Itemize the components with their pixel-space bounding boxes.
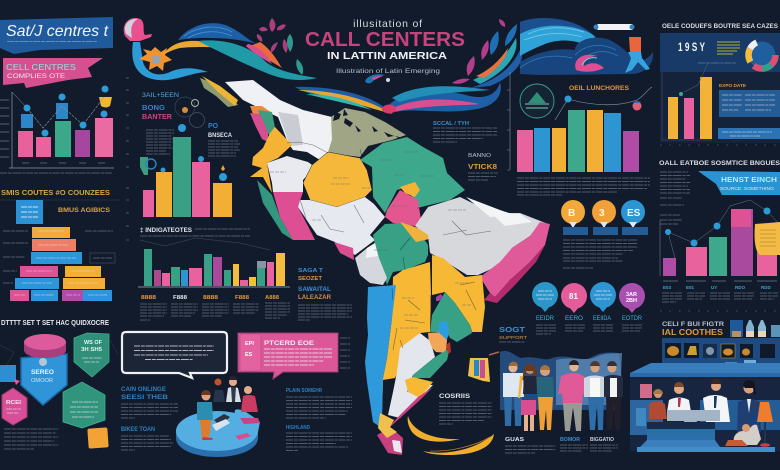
text block: online: CAIN ONLINGE [121, 387, 166, 393]
illustration: meeting table [176, 376, 260, 457]
chart captions: F888 [173, 295, 187, 301]
icon group: coloured shields: OMOOR [31, 378, 53, 384]
panel: right dashboard: 1 9 S Y [678, 40, 705, 54]
icons: four balloon circles: 81 [569, 292, 578, 301]
figure: agent three [703, 379, 730, 422]
figure: pink man [558, 360, 587, 431]
icon: small subtitle glyph [365, 74, 390, 83]
note: yellow [755, 222, 780, 255]
text block: cosrios [439, 393, 492, 424]
title [305, 18, 465, 75]
text block: right list [660, 172, 690, 224]
icon group: coloured shields: RCEI [6, 400, 22, 406]
text block: ticker: BANNO [468, 153, 492, 159]
laptop [212, 414, 260, 440]
desk [637, 422, 775, 452]
panel: blue banner [698, 171, 780, 195]
figure: man left [503, 362, 524, 426]
illustration: call center desk [630, 363, 780, 452]
text block: chart notes [517, 178, 650, 195]
panel: pink ribbon heading: CELL CENTRES [6, 63, 76, 72]
region: big yellow [377, 262, 431, 415]
bar chart: right lower: E03 [663, 285, 672, 290]
chart group: left chart headings: BANTER [142, 114, 172, 121]
stacked bars panel: BMUS AGIBICS [58, 208, 110, 214]
chart captions [140, 295, 290, 320]
illustration: group of people [500, 351, 623, 431]
text block: people captions: BIGGATIO [590, 437, 614, 443]
title: CALL CENTERS [305, 28, 465, 51]
icons: three circles with labels [561, 200, 648, 235]
chart captions: 8888 [141, 295, 156, 301]
region: pink south [377, 387, 433, 455]
text block: mid labels [298, 268, 352, 320]
figure: woman one [518, 364, 537, 431]
text block: south [499, 325, 527, 342]
text block: circles caption [563, 240, 638, 268]
region: pink Ecuador [334, 242, 354, 260]
region: yellow east [432, 255, 485, 332]
region: blue Chile [365, 285, 396, 432]
region: pink small [385, 190, 422, 227]
heading: right top panel: OELE CODUEFS BOUTRE SEA CAZES [662, 23, 779, 30]
region: pink east Brazil [480, 222, 550, 297]
region: green inner [430, 292, 472, 342]
figure: back person one [226, 376, 241, 402]
region: green south [413, 348, 450, 378]
text block: scale note [433, 121, 498, 142]
figure: agent one [649, 389, 667, 419]
figure: white shirt man [584, 361, 606, 430]
icons: three circles with labels: B [568, 208, 575, 219]
icon: map flag [468, 352, 499, 382]
text block: scale note: SCCAL / TYH [433, 121, 469, 127]
text block: mid labels: LALEAZAR [298, 294, 331, 301]
callout: white speech bubble [122, 332, 227, 378]
text block: cosrios: COSRIIS [439, 393, 471, 400]
region: green strip [257, 180, 293, 240]
bar chart: wide multi series [138, 238, 290, 287]
panel: left title banner: Sat/J centres t [6, 23, 109, 40]
text block: indicators heading [140, 228, 250, 236]
chart captions: A888 [265, 295, 279, 301]
region: blue lake [438, 321, 449, 343]
text block: people captions [505, 437, 618, 453]
title: IN LATTIN AMERICA [327, 51, 447, 62]
chart group: left chart headings: PO [208, 123, 219, 130]
icon: green hexagon [63, 382, 105, 428]
region: Mexico [225, 80, 332, 160]
chart: top middle right: OEIL LUNCHORES [569, 85, 630, 92]
chart group: left chart headings [142, 92, 240, 156]
text block: plain: HIGHLAND [286, 425, 310, 431]
region: yellow south [405, 377, 433, 398]
text block: online: SEESI THEB [121, 395, 169, 401]
region: olive north [328, 108, 406, 157]
icons: four balloon circles [532, 282, 645, 334]
callout: pink speech box [238, 333, 350, 379]
title: Illustration of Latin Emerging [336, 68, 440, 75]
text block: shields caption [4, 429, 58, 449]
region: green Venezuela [373, 223, 428, 285]
icon group: coloured shields [0, 333, 118, 449]
icons: four balloon circles: EEIIDA [593, 315, 612, 322]
region: grey andes [355, 243, 387, 285]
chart captions: F888 [235, 295, 249, 301]
text block: mid labels: SAWAITAL [298, 286, 331, 293]
stacked bars panel [0, 200, 120, 301]
heading: right second panel: OALL EATBOE SOSMTICE BNGUES [659, 160, 780, 167]
region: white inner [267, 156, 315, 192]
map labels [270, 152, 472, 328]
text block: plain: PLAIN SOMEHR [286, 388, 322, 394]
icon: green shield [74, 333, 109, 377]
bar chart: right lower: RDO [735, 285, 745, 290]
chart captions: 8888 [203, 295, 218, 301]
figure: agent four [737, 380, 761, 432]
icon: orange star [139, 47, 172, 71]
region: Baja coast [200, 78, 238, 107]
decoration: right top swoosh [382, 19, 522, 114]
region: yellow small [400, 182, 420, 197]
panel: blue banner: SOURCE: SOMETHING [720, 186, 775, 191]
icon: orange lamp [757, 402, 773, 447]
figure: orange and blue person [625, 37, 650, 73]
region: white Brazil [415, 197, 548, 275]
label and info boxes: EXPO DATE [719, 83, 746, 88]
icons: three circles with labels: 3 [599, 208, 605, 219]
region: peach [428, 332, 447, 353]
text block: online [121, 387, 178, 450]
icon: pink cylinder [24, 342, 66, 358]
callout: pink speech box: EPI [245, 341, 254, 347]
region: yellow Guatemala band [250, 127, 292, 193]
panel: tile strip [662, 338, 780, 370]
icons: four balloon circles: 2BH [626, 298, 637, 304]
icon group: coloured shields: WS OF [84, 340, 103, 346]
text block: online: BIKEE TOAN [121, 427, 155, 433]
icon: blue shield [21, 354, 67, 405]
figure: front person [197, 390, 213, 440]
region: pink and green west coast [250, 106, 272, 117]
map: Latin America [200, 76, 550, 455]
text block: mid labels: SEOZET [298, 276, 323, 282]
icon group: coloured shields: SEREO [31, 370, 54, 376]
text block: south: SUPPORT [499, 335, 527, 340]
text block: south: SOGT [499, 325, 525, 334]
chart group: left chart headings: BNSECA [208, 133, 233, 139]
text block: indicators heading: ‡ INDIGATEOTES [140, 228, 192, 234]
bar chart: left centre [140, 124, 232, 217]
figure: agent two [667, 382, 691, 412]
figure: back person two [213, 378, 258, 412]
bar chart: right lower: E01 [686, 285, 695, 290]
region: large green [360, 137, 465, 213]
icon: white bar [594, 24, 634, 30]
bar chart: right lower: UY [711, 285, 717, 290]
icons: bottles strip [730, 320, 780, 337]
heading: shields section: DTTTT SET T SET HAC QUIDXOCRE [1, 320, 109, 327]
heading: call section [662, 321, 724, 337]
figure: dark jacket man [604, 361, 623, 430]
region: pink Peru [273, 192, 315, 240]
region borders [287, 142, 491, 350]
text block: mid labels: SAGA T [298, 268, 324, 274]
decoration: top right waves [520, 18, 653, 75]
bar chart: top left [0, 86, 114, 173]
panel: right dashboard [660, 33, 780, 145]
title: illusitation of [353, 18, 423, 30]
bar chart: right lower [660, 200, 780, 311]
icon: orange note [87, 427, 109, 449]
icons: four balloon circles: EOTDR [622, 315, 642, 322]
panel: pink ribbon heading: COMPLIES OTE [7, 73, 66, 80]
region: yellow Amazon small [400, 222, 438, 242]
region: white Colombia [298, 197, 385, 255]
decoration: tick column [126, 78, 129, 240]
heading: call section: IAL COOTHES [662, 328, 724, 337]
chart group: left chart headings: BONG [142, 105, 166, 112]
text block: plain [286, 388, 352, 450]
panel: left title banner [0, 17, 113, 54]
callout: pink speech box: PTCERD EOE [264, 340, 315, 347]
panel: pink ribbon heading [3, 58, 103, 88]
heading: countries: SMIS COUTES #O COUNZEES [1, 188, 110, 197]
text block: ticker: VTICK8 [468, 162, 497, 171]
bar chart: right lower: RDD [761, 285, 771, 290]
figure: woman two [537, 365, 554, 430]
region: white south [388, 333, 435, 418]
icons: four balloon circles: EERO [565, 315, 583, 322]
icon: green emblem [520, 84, 554, 118]
region: yellow centre [303, 152, 372, 207]
icon: yellow bananas [408, 416, 494, 455]
icon: top left pink hook and tube [124, 18, 208, 80]
chart group: left chart headings: 3AIL+5EEN [142, 92, 179, 99]
icons: three circles with labels: ES [627, 208, 641, 219]
icons: four balloon circles: EEIDR [536, 315, 554, 322]
icon: pink hexagon [2, 388, 27, 425]
icon: left leaves [257, 18, 288, 53]
text block: people captions: GUAS [505, 437, 524, 443]
bar chart: dashboard [662, 63, 712, 140]
text block: ticker [468, 153, 498, 180]
icons: four balloon circles: 3AR [626, 292, 637, 298]
icon: blue box [0, 365, 16, 382]
callout: pink speech box: ES [245, 352, 253, 358]
decoration: left top swoosh [162, 18, 392, 114]
icon: pink swirl [575, 55, 604, 72]
panel: blue banner: HENST EINCH [721, 177, 777, 184]
heading: call section: CELI F BUI FIGTR [662, 321, 724, 328]
monitor [667, 410, 720, 429]
chart: top middle right [507, 72, 652, 172]
figure: seated person [725, 424, 761, 446]
icon group: coloured shields: 3H SH5 [81, 347, 102, 353]
text block: people captions: BOMOR [560, 437, 580, 443]
chart: donut [748, 42, 776, 68]
